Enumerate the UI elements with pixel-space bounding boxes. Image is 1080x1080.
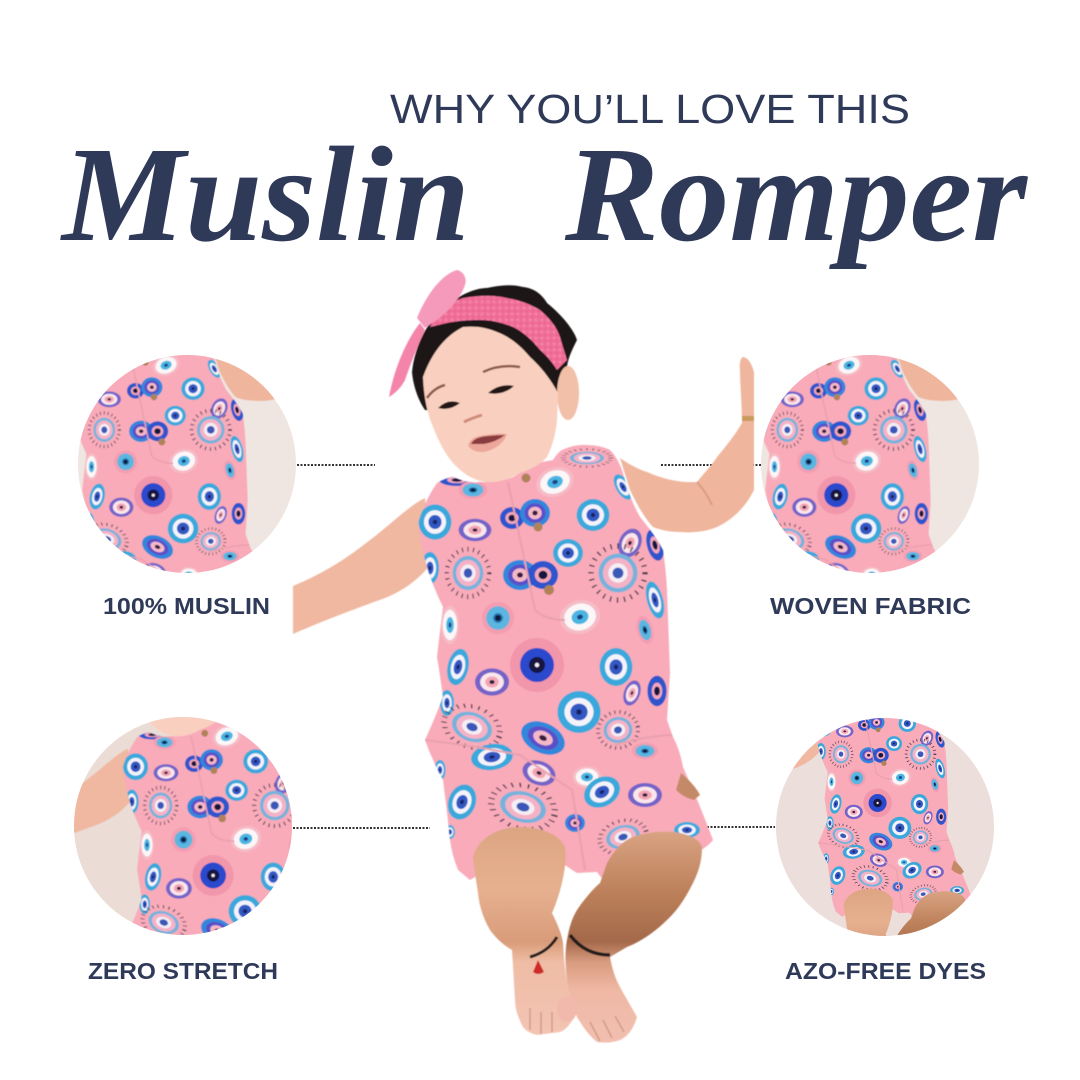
ear — [557, 366, 579, 420]
brows — [427, 366, 520, 398]
headband — [430, 296, 567, 370]
title: Muslin Romper: Romper — [564, 120, 1028, 270]
fold shading — [425, 482, 675, 870]
feature labels: 100% MUSLIN — [103, 593, 270, 619]
circle: azo-free dyes detail — [776, 718, 994, 936]
baby photo illustration — [293, 270, 754, 1043]
romper — [410, 440, 720, 890]
hair — [412, 285, 577, 420]
bow — [389, 270, 466, 397]
side tab — [676, 773, 700, 800]
anklet charm — [533, 960, 544, 974]
title: Muslin Romper: Muslin — [60, 120, 470, 270]
upper body — [293, 270, 754, 890]
connector lines — [293, 465, 775, 828]
title: Muslin Romper — [60, 120, 1028, 270]
nose — [464, 415, 482, 422]
circle: zero stretch detail — [74, 717, 292, 935]
circle: woven fabric detail — [761, 355, 979, 573]
big toe — [557, 996, 577, 1022]
eyes — [438, 401, 460, 409]
arms — [293, 357, 754, 634]
anklets — [530, 937, 557, 957]
right leg — [566, 832, 702, 1043]
buttons — [522, 474, 554, 595]
circle: 100% muslin detail — [78, 355, 296, 573]
feature labels: AZO-FREE DYES — [785, 958, 986, 984]
feature labels — [88, 593, 986, 984]
left leg — [473, 827, 577, 1035]
toes — [530, 1008, 624, 1041]
face — [423, 327, 558, 482]
heading: why you'll love this: WHY YOU’LL LOVE THIS — [390, 86, 910, 132]
feature labels: ZERO STRETCH — [88, 958, 278, 984]
feature labels: WOVEN FABRIC — [770, 593, 971, 619]
mouth — [468, 434, 507, 452]
